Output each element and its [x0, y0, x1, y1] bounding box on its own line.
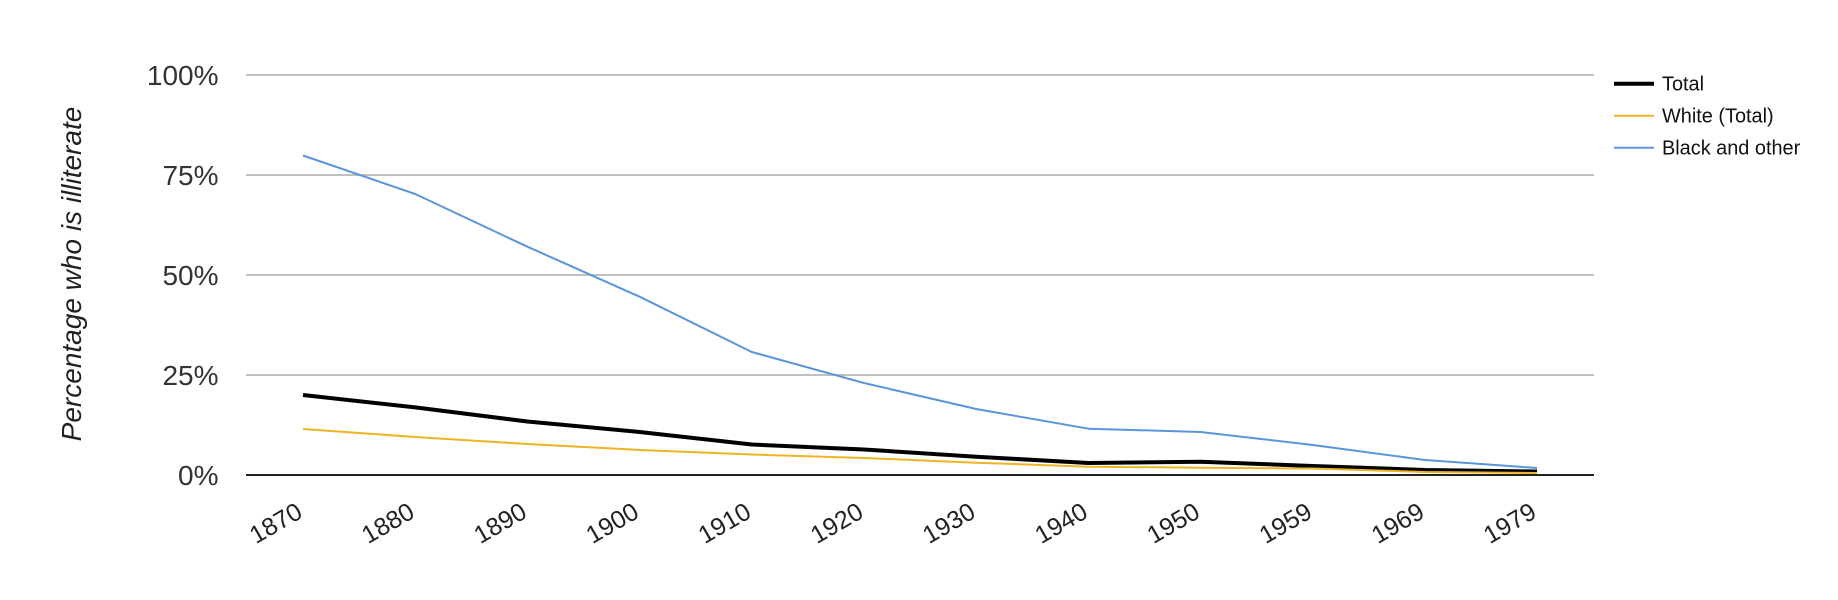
x axis labels: 1979 [1479, 497, 1541, 550]
line: White (Total) [303, 429, 1537, 473]
x axis labels: 1880 [357, 497, 419, 550]
x axis labels: 1969 [1367, 497, 1429, 550]
x axis labels: 1870 [245, 497, 307, 550]
y axis labels: 0% [178, 460, 218, 491]
x axis labels: 1950 [1142, 497, 1205, 550]
x axis labels: 1930 [918, 497, 980, 550]
legend item: White (Total): White (Total) [1662, 106, 1774, 128]
y axis labels: 100% [147, 60, 218, 91]
y axis labels: 75% [162, 160, 218, 191]
legend item: Black and other: Black and other [1662, 138, 1801, 160]
line: Total [303, 395, 1537, 472]
y axis labels [147, 60, 218, 491]
line: Black and other [303, 156, 1537, 468]
legend item: Total: Total [1662, 74, 1704, 96]
x axis labels: 1920 [806, 497, 868, 550]
y axis labels: 50% [162, 260, 218, 291]
x axis labels: 1940 [1030, 497, 1092, 550]
y axis labels: 25% [162, 360, 218, 391]
legend item: Total [1614, 74, 1704, 96]
x axis labels: 1900 [581, 497, 644, 550]
x axis labels: 1890 [469, 497, 531, 550]
x axis labels [245, 497, 1541, 550]
y axis title: Percentage who is illiterate [56, 107, 87, 441]
legend [1614, 74, 1801, 160]
x axis labels: 1910 [694, 497, 756, 550]
x axis labels: 1959 [1255, 497, 1317, 550]
